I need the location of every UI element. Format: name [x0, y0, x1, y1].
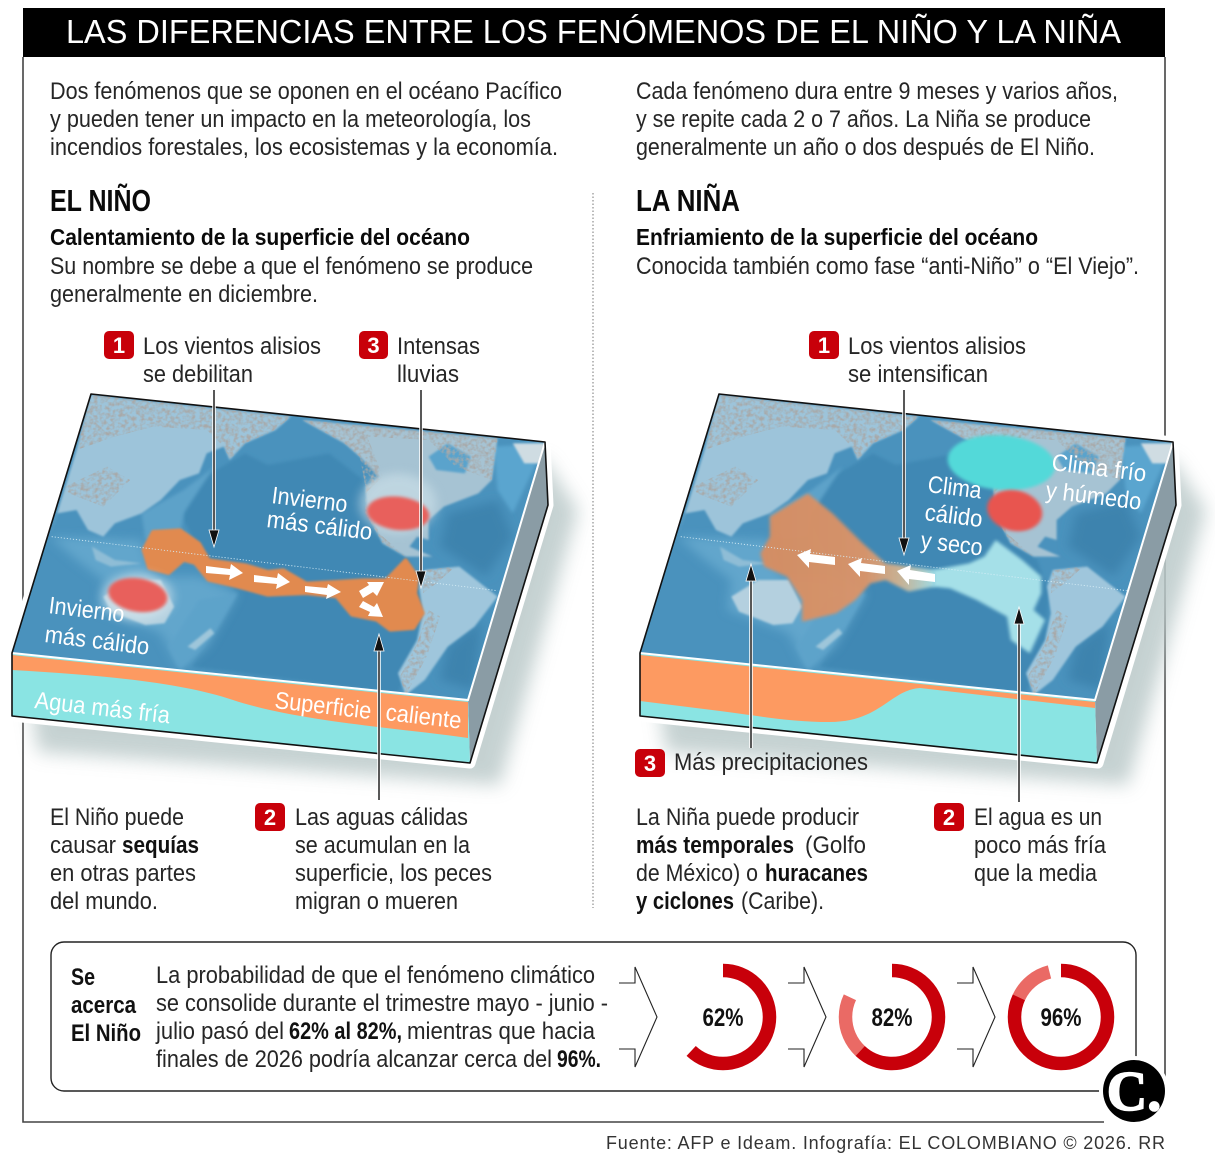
map labels: Agua más fría [33, 687, 172, 729]
note: sequías: sequías [122, 832, 199, 859]
callout 3: Niña: 3 [644, 751, 656, 776]
heading: La Niña: Enfriamiento de la superficie del océano [636, 224, 1038, 250]
wind arrows [797, 549, 935, 585]
donut 96%: 96% [1040, 1004, 1082, 1032]
panel heading: acerca [71, 992, 137, 1019]
map surface: La Niña [641, 394, 1172, 699]
callout 3: Niño: 3 [367, 333, 380, 358]
warm pool west [760, 493, 935, 622]
intro text right: Cada fenómeno dura entre 9 meses y varios años, [636, 78, 1118, 105]
callout 2: Niño [255, 803, 492, 915]
map labels: caliente [384, 699, 463, 735]
cross-section: cold water [640, 653, 1097, 763]
title bar: LAS DIFERENCIAS ENTRE LOS FENÓMENOS DE EL NIÑO Y LA NIÑA [66, 13, 1121, 50]
map surface: El Niño [13, 394, 544, 699]
heading: El Niño [50, 183, 533, 308]
block diagram: La Niña [628, 380, 1215, 785]
halo North America [360, 473, 436, 533]
note: temporales [636, 804, 868, 915]
intro text right: generalmente un año o dos después de El Niño. [636, 134, 1095, 161]
note: temporales: de México) o [636, 860, 758, 887]
callout 1: Niña [809, 331, 1026, 388]
callout 1: Niño: Los vientos alisios [143, 333, 321, 360]
center divider [592, 193, 594, 908]
callout 2: Niño: 2 [264, 805, 276, 830]
equator line [681, 537, 1127, 591]
callout 2: Niña [934, 803, 1107, 887]
panel text: La probabilidad de que el fenómeno climático [156, 962, 595, 989]
heading: La Niña: LA NIÑA [636, 183, 740, 218]
callout 3: Niño [359, 331, 480, 388]
arrow: Niño rains [416, 390, 426, 588]
cross-section: cold water [12, 653, 470, 763]
callout 2: Niña: El agua es un [974, 804, 1102, 831]
callout 3: Niña: Más precipitaciones [674, 749, 868, 776]
panel text: mientras que hacia [407, 1018, 596, 1045]
panel text: 62% al 82%, [289, 1018, 402, 1045]
panel text: se consolide durante el trimestre mayo - junio - [156, 990, 608, 1017]
map labels: más cálido [43, 621, 151, 661]
callout 1: Niño: 1 [113, 333, 125, 358]
cross-section: warm surface [12, 655, 468, 738]
warm water band [144, 530, 423, 630]
heading: El Niño: Su nombre se debe a que el fenómeno se produce [50, 253, 533, 280]
note: sequías: del mundo. [50, 888, 158, 915]
callout 2: Niño: Las aguas cálidas [295, 804, 468, 831]
callout 3: Niño: Intensas [397, 333, 480, 360]
note: temporales: huracanes [765, 860, 868, 887]
note: temporales: (Golfo [805, 832, 866, 859]
chevron arrow 3 [957, 967, 995, 1067]
map labels: Superficie [273, 687, 373, 725]
side face [468, 442, 548, 763]
warm dry spot [981, 483, 1049, 538]
halo Australia [103, 573, 172, 620]
callout 2: Niña: que la media [974, 860, 1098, 887]
callout 3: Niño: lluvias [397, 361, 459, 388]
map labels [919, 449, 1148, 562]
block diagram: El Niño [0, 380, 600, 785]
callout 1: Niña: se intensifican [848, 361, 988, 388]
chevron arrow 1 [619, 967, 657, 1067]
callout 2: Niño: se acumulan en la [295, 832, 471, 859]
side face [1095, 442, 1176, 763]
arrow: Niña cold water [1014, 607, 1024, 802]
map labels [33, 482, 463, 735]
cold humid area [945, 431, 1058, 495]
note: temporales: La Niña puede producir [636, 804, 859, 831]
arrow: Niña winds [899, 390, 909, 555]
callout 2: Niño: superficie, los peces [295, 860, 492, 887]
map labels: Invierno [47, 592, 126, 628]
note: sequías: El Niño puede [50, 804, 184, 831]
heading: La Niña: Conocida también como fase “anti-Niño” o “El Viejo”. [636, 253, 1139, 280]
note: sequías [50, 804, 199, 915]
heading: El Niño: generalmente en diciembre. [50, 281, 318, 308]
panel heading: Se [71, 964, 95, 991]
heading: El Niño: Calentamiento de la superficie del océano [50, 224, 470, 250]
donut 82%: 82% [872, 1004, 912, 1032]
donut 62%: 62% [702, 1004, 744, 1032]
intro text right: y se repite cada 2 o 7 años. La Niña se produce [636, 106, 1091, 133]
arrow: Niño waters [374, 634, 384, 800]
callout 2: Niña: poco más fría [974, 832, 1107, 859]
panel: se acerca El Niño [51, 942, 1136, 1091]
donut 62% [676, 970, 770, 1064]
cross-section: warm layer [640, 655, 1095, 722]
equator line [52, 537, 498, 591]
cold water east [933, 540, 1045, 653]
map labels: y seco [919, 527, 984, 562]
intro text right [636, 78, 1118, 161]
panel heading [71, 964, 141, 1047]
map labels: cálido [923, 499, 984, 533]
intro text left: Dos fenómenos que se oponen en el océano Pacífico [50, 78, 562, 105]
note: sequías: en otras partes [50, 860, 196, 887]
note: temporales: (Caribe). [741, 888, 824, 915]
heading: La Niña [636, 183, 1139, 280]
warm winter spot Australia [106, 576, 170, 614]
wind arrows [206, 564, 384, 617]
map labels: más cálido [265, 506, 374, 546]
callout 1: Niña: Los vientos alisios [848, 333, 1026, 360]
note: temporales: y ciclones [636, 888, 734, 915]
heading: El Niño: EL NIÑO [50, 183, 151, 218]
note: temporales: más temporales [636, 832, 794, 859]
logo: El Colombiano: C. [1107, 1061, 1161, 1123]
intro text left: incendios forestales, los ecosistemas y la economía. [50, 134, 558, 161]
callout 2: Niño: migran o mueren [295, 888, 458, 915]
donut 82% [846, 970, 938, 1064]
map labels: Clima frío [1050, 449, 1148, 488]
arrow: Niño winds [209, 390, 219, 547]
panel text: finales de 2026 podría alcanzar cerca del [156, 1046, 552, 1073]
panel text [155, 962, 608, 1073]
map labels: Clima [926, 471, 984, 505]
callout 1: Niño [104, 331, 321, 388]
logo: El Colombiano [1099, 1056, 1169, 1126]
warm winter spot North America [364, 493, 432, 534]
source line: Fuente: AFP e Ideam. Infografía: EL COLOMBIANO © 2026. RR [606, 1133, 1165, 1153]
panel heading: El Niño [71, 1020, 141, 1047]
callout 2: Niña: 2 [943, 805, 955, 830]
note: sequías: causar [50, 832, 116, 859]
arrow: Niña precipitation [746, 564, 756, 748]
map labels: y húmedo [1044, 477, 1143, 516]
donut 96% [1014, 970, 1108, 1064]
map labels: Invierno [270, 482, 349, 518]
callout 1: Niño: se debilitan [143, 361, 253, 388]
panel text: julio pasó del [155, 1018, 284, 1045]
intro text left: y pueden tener un impacto en la meteorología, los [50, 106, 531, 133]
panel text: 96%. [557, 1046, 601, 1073]
callout 1: Niña: 1 [818, 333, 830, 358]
chevron arrow 2 [788, 967, 826, 1067]
intro text left [50, 78, 562, 161]
